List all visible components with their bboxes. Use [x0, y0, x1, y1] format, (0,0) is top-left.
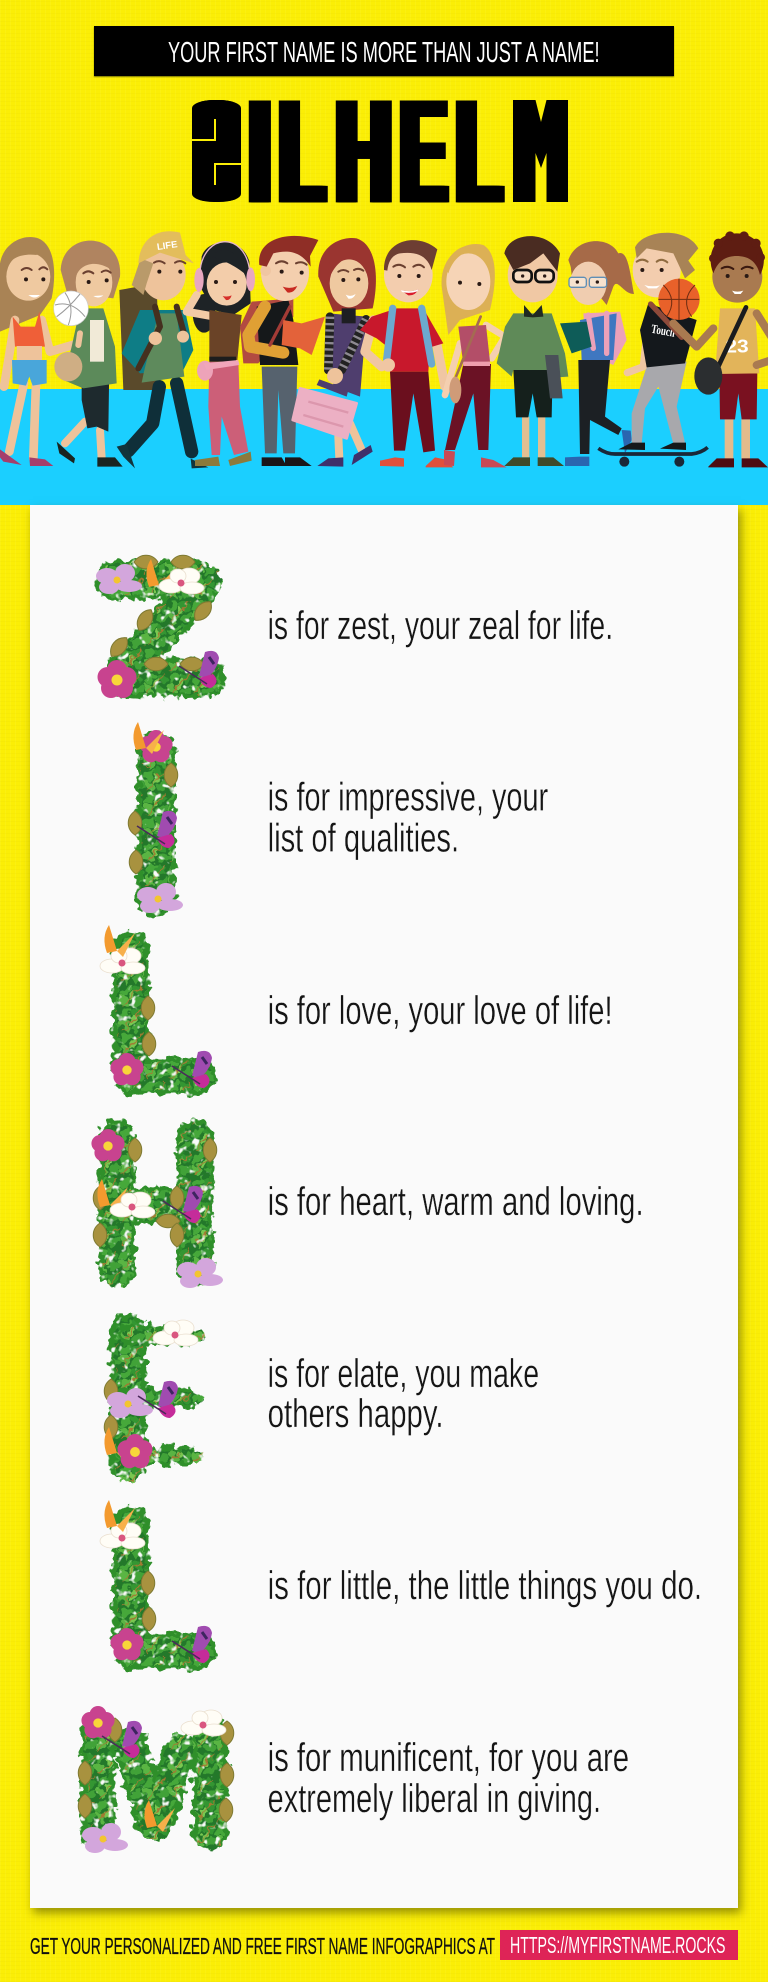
title letter E: E — [400, 69, 447, 234]
person: girl with volleyball — [54, 241, 123, 467]
leaves and flowers on I — [128, 722, 183, 913]
person: boy in red shirt — [360, 240, 453, 467]
description H: is for heart, warm and loving. — [268, 1180, 644, 1224]
title letter I: I — [249, 69, 271, 234]
floral letter L — [100, 925, 212, 1088]
person: skateboarder with basketball — [598, 233, 708, 467]
person: blonde girl — [442, 244, 507, 467]
blue floor band — [0, 389, 768, 505]
floral letter I — [128, 722, 183, 913]
person: curly-haired boy with jersey: 23 — [725, 336, 749, 357]
person: girl with headphones — [187, 242, 255, 466]
title letter L: L — [279, 69, 325, 234]
person: girl with ponytail and tablet — [560, 241, 634, 466]
description E: is for elate, you make — [268, 1352, 539, 1396]
description Z: is for zest, your zeal for life. — [268, 604, 613, 648]
leaves and flowers on Z — [96, 555, 219, 698]
title letter L: L — [456, 69, 502, 234]
description M — [268, 1736, 629, 1821]
description I: list of qualities. — [268, 817, 459, 861]
title letter H: H — [336, 69, 392, 234]
description I: is for impressive, your — [268, 776, 548, 820]
illustration: crowd of young people — [0, 231, 768, 468]
person: red-haired boy with book — [240, 236, 325, 466]
person: curly-haired boy with jersey — [658, 231, 768, 467]
panel: white letter list — [30, 505, 738, 1908]
floral letter E — [104, 1320, 198, 1468]
leaves and flowers on E — [104, 1320, 198, 1468]
person: hiker with yellow cap and backpack — [117, 231, 208, 468]
leaves and flowers on H — [91, 1129, 223, 1288]
header banner — [94, 26, 674, 76]
leaves and flowers on second L — [100, 1500, 212, 1663]
person: girl in orange top — [0, 237, 78, 466]
person: hiker with yellow cap and backpack: LIFE — [156, 239, 178, 252]
person: boy with glasses and laptop — [497, 236, 568, 466]
floral letter H — [91, 1129, 223, 1288]
floral letter Z — [96, 555, 219, 698]
person: girl with bob haircut and pink bag — [293, 238, 376, 467]
leaves and flowers on M — [78, 1706, 234, 1853]
title: name ZILHELM — [192, 69, 568, 234]
description E — [268, 1352, 539, 1436]
floral letter M — [78, 1706, 234, 1853]
description L: is for love, your love of life! — [268, 989, 613, 1033]
description I — [268, 776, 548, 861]
description M: is for munificent, for you are — [268, 1736, 629, 1780]
person: skateboarder with basketball: Touch — [650, 322, 676, 340]
leaves and flowers on L — [100, 925, 212, 1088]
description M: extremely liberal in giving. — [268, 1777, 601, 1821]
floral letter L, second — [100, 1500, 212, 1663]
description E: others happy. — [268, 1392, 444, 1436]
